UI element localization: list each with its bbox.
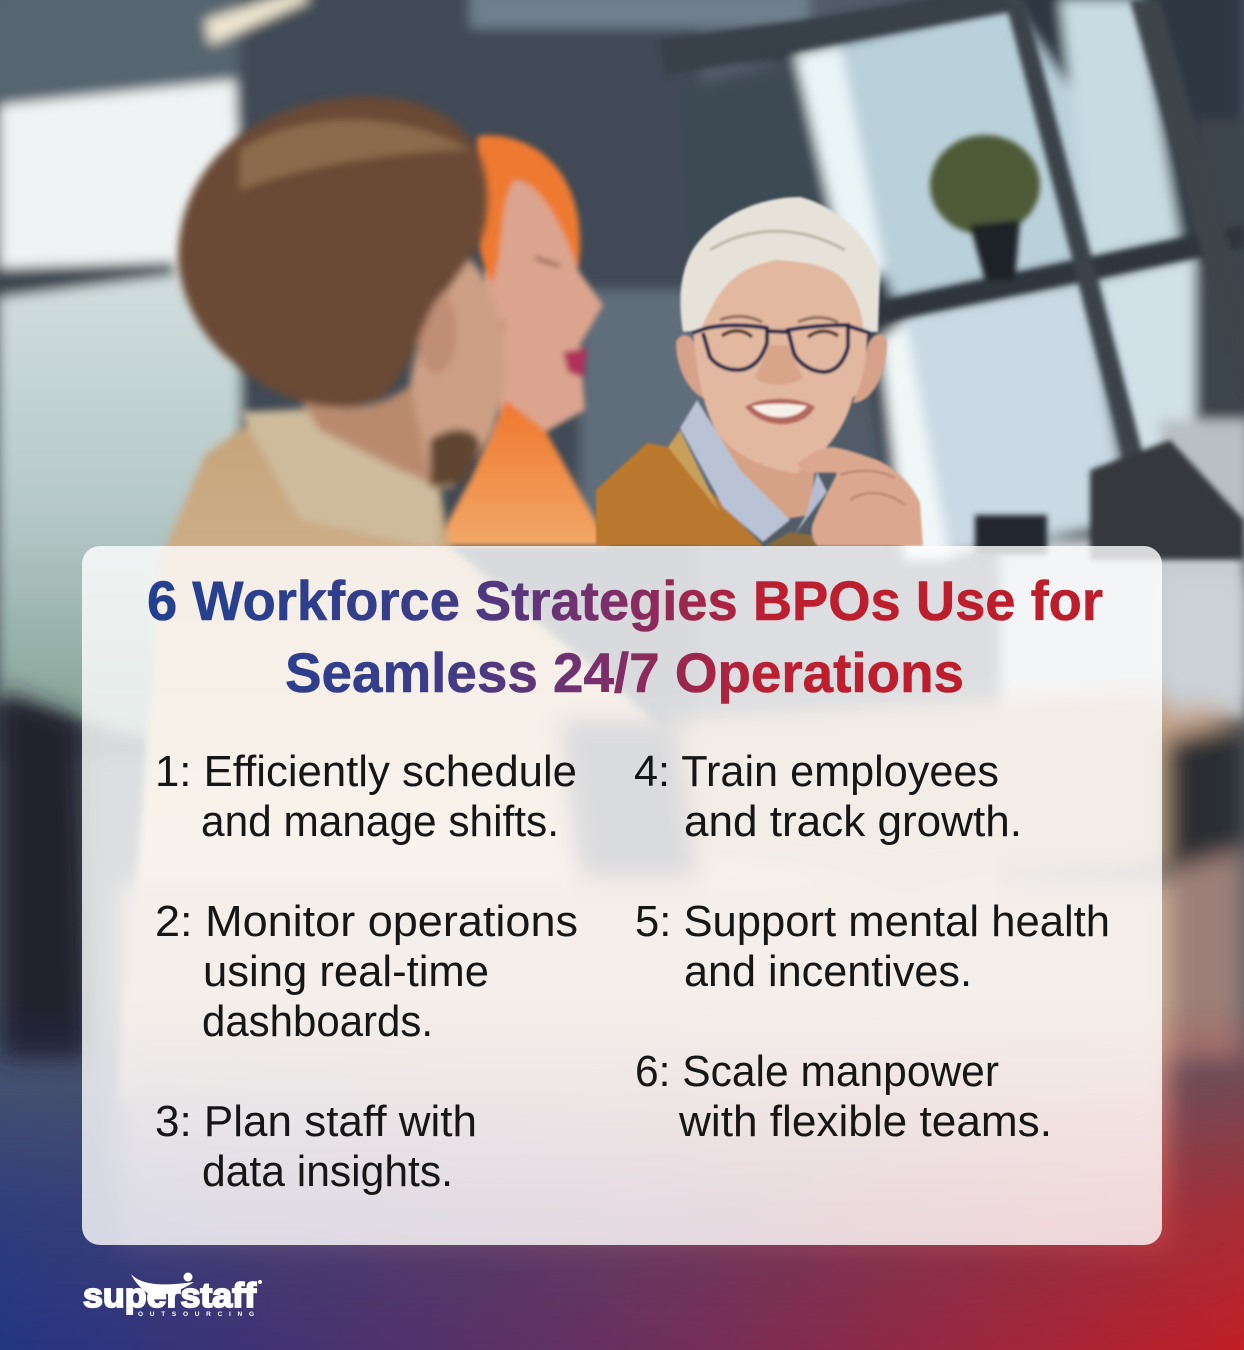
logo: superstaff outsourcing: superstaff xyxy=(83,1277,257,1315)
eyes xyxy=(722,331,838,337)
glasses xyxy=(692,325,870,372)
strategy 3: data insights. xyxy=(202,1147,453,1196)
strategy 5: and incentives. xyxy=(684,947,972,996)
person: man in foreground (blurred, back view) xyxy=(120,97,1000,1100)
ears xyxy=(676,335,708,400)
strategy 3 xyxy=(155,1097,477,1196)
mouth xyxy=(745,399,815,424)
strategy 5: 5: Support mental health xyxy=(635,897,1110,946)
title: 6 Workforce Strategies BPOs Use for xyxy=(147,569,1103,632)
neck xyxy=(717,433,815,522)
hand xyxy=(797,447,923,546)
hair xyxy=(680,197,880,332)
eyebrows xyxy=(720,316,838,322)
strategy 6: 6: Scale manpower xyxy=(635,1047,999,1096)
scarf xyxy=(668,430,720,512)
title xyxy=(147,569,1103,704)
strategy 1: 1: Efficiently schedule xyxy=(155,747,577,796)
translucent content panel xyxy=(82,546,1162,1245)
strategy 2: 2: Monitor operations xyxy=(155,897,578,946)
strategy 3: 3: Plan staff with xyxy=(155,1097,477,1146)
footer gradient band xyxy=(0,1000,1244,1350)
logo: superstaff outsourcing: OUTSOURCING xyxy=(138,1311,254,1318)
face xyxy=(693,245,867,473)
strategy 2: dashboards. xyxy=(202,997,433,1046)
sweater xyxy=(596,443,763,546)
collar xyxy=(680,400,790,542)
strategy 4: 4: Train employees xyxy=(634,747,999,796)
icon: swoosh xyxy=(131,1274,194,1297)
nose xyxy=(755,345,803,384)
person: smiling woman with glasses xyxy=(596,197,923,546)
strategy 6 xyxy=(635,1047,1052,1146)
strategy 2 xyxy=(155,897,578,1046)
title: Seamless 24/7 Operations xyxy=(285,641,964,704)
strategy 1 xyxy=(155,747,577,846)
strategy 1: and manage shifts. xyxy=(201,797,559,846)
strategy 4: and track growth. xyxy=(684,797,1022,846)
lower blurred foreground xyxy=(0,580,1244,1250)
strategy 2: using real-time xyxy=(203,947,489,996)
strategy 6: with flexible teams. xyxy=(678,1097,1052,1146)
strategy 5 xyxy=(635,897,1110,996)
strategy 4 xyxy=(634,747,1022,846)
person: woman with orange hair xyxy=(435,135,610,546)
